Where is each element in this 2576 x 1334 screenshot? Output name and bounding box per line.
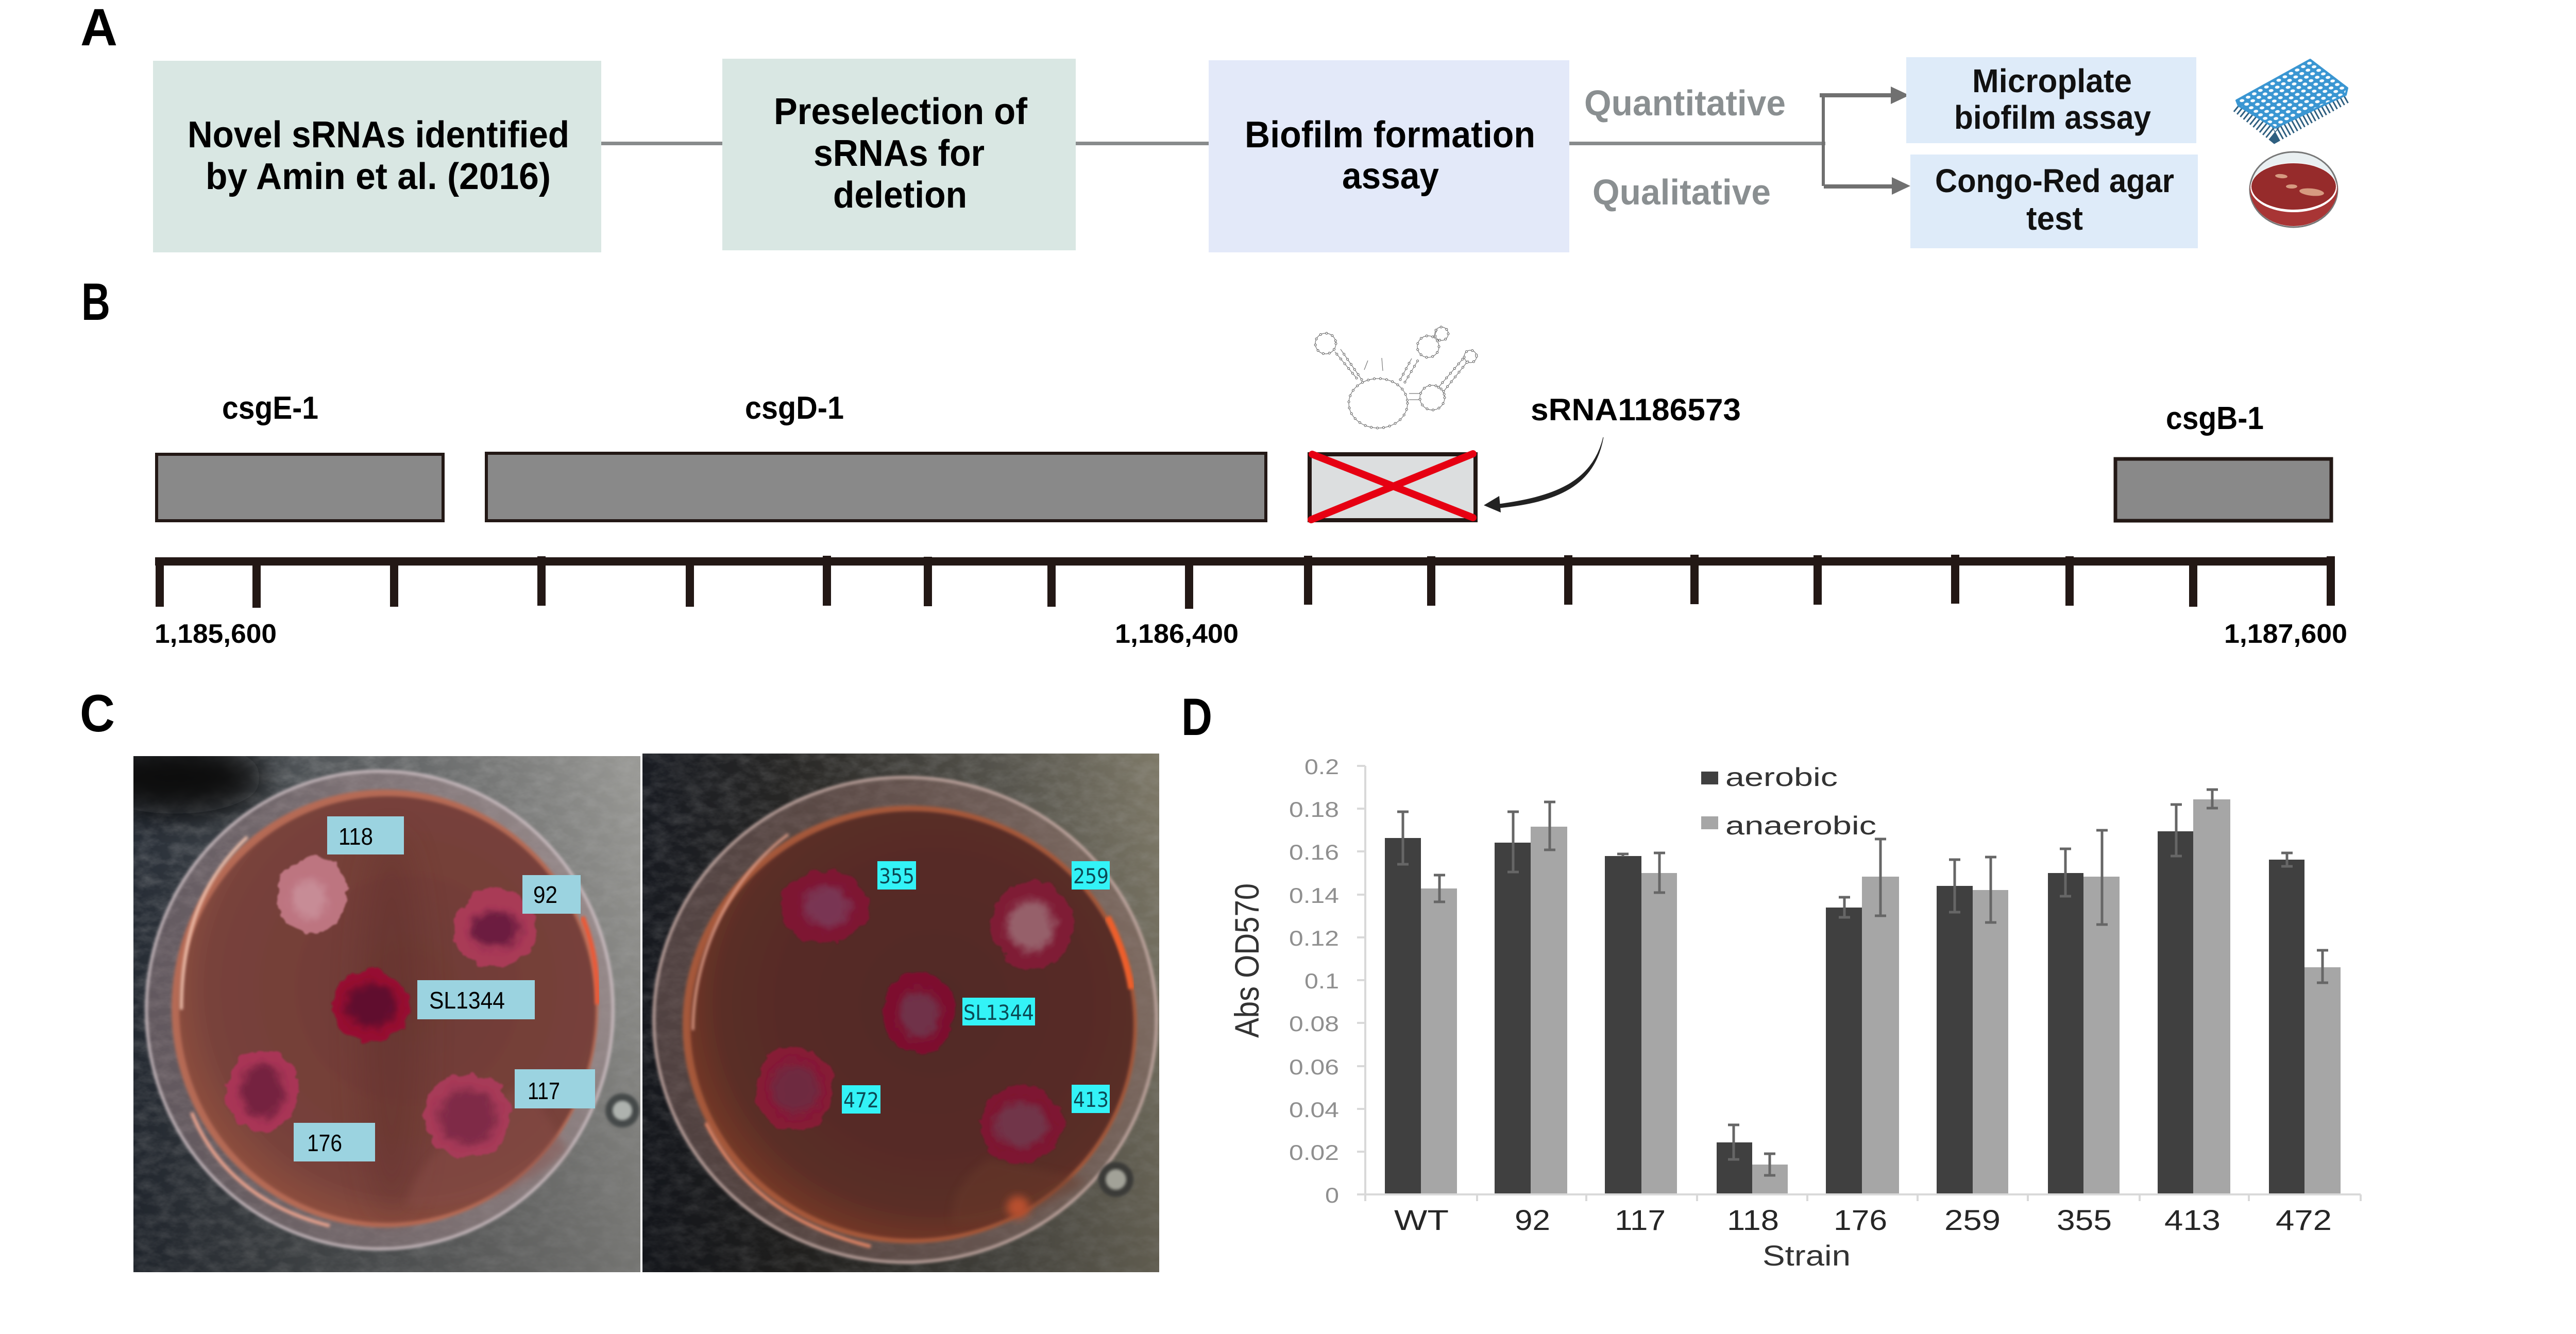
photo background xyxy=(642,754,1159,1272)
label 117: 117 xyxy=(528,1078,560,1104)
panel C: right agar plate photo xyxy=(642,754,1159,1272)
legend: anaerobic xyxy=(1725,811,1876,840)
colony 117 xyxy=(425,1073,511,1158)
label 118: 118 xyxy=(338,823,373,850)
error bars xyxy=(1397,790,2328,1175)
colony 472 xyxy=(756,1047,833,1131)
y axis tick labels: 0.14 xyxy=(1289,883,1339,908)
x axis category labels xyxy=(1394,1204,2332,1236)
gene csgD-1 xyxy=(486,453,1266,521)
box: novel sRNAs: by Amin et al. (2016) xyxy=(206,156,551,197)
icon: microplate xyxy=(2236,60,2347,133)
x axis category labels: 117 xyxy=(1615,1204,1666,1236)
label 176 xyxy=(294,1123,375,1161)
deleted sRNA gene xyxy=(1310,454,1476,520)
axes xyxy=(1357,766,2361,1201)
gene csgB-1 xyxy=(2115,459,2331,521)
y axis tick labels: 0.06 xyxy=(1289,1055,1339,1079)
panel label D: D xyxy=(1181,688,1212,746)
box: congo-red agar test: test xyxy=(2026,200,2083,237)
x axis title: Strain xyxy=(1762,1239,1851,1272)
colony 92 xyxy=(453,891,537,967)
bead marker xyxy=(1098,1162,1133,1197)
label 118 xyxy=(327,816,404,854)
label 472: 472 xyxy=(843,1089,879,1113)
x axis category labels: 413 xyxy=(2164,1204,2221,1236)
coordinate 1,185,600: 1,185,600 xyxy=(155,619,277,649)
branching arrows xyxy=(1820,87,1910,195)
colony 259 xyxy=(991,881,1074,968)
box: preselection: deletion xyxy=(833,175,967,216)
label: qualitative: Qualitative xyxy=(1592,172,1771,212)
aerobic bars xyxy=(1385,831,2304,1193)
label: quantitative: Quantitative xyxy=(1584,83,1786,123)
gene csgE-1 xyxy=(157,454,443,521)
coordinate axis xyxy=(155,555,2335,609)
y axis tick labels: 0.08 xyxy=(1289,1012,1339,1036)
label 176: 176 xyxy=(307,1130,342,1156)
box: biofilm formation assay: assay xyxy=(1342,156,1439,197)
y axis tick labels: 0.04 xyxy=(1289,1098,1339,1122)
label 355: 355 xyxy=(879,865,914,888)
icon: petri dish xyxy=(2250,152,2337,227)
label 92: 92 xyxy=(533,881,557,908)
y axis tick labels: 0.12 xyxy=(1289,926,1339,950)
box: preselection xyxy=(722,59,1076,250)
photo background xyxy=(133,756,640,1272)
label 117 xyxy=(515,1069,595,1108)
panel label C: C xyxy=(80,684,115,743)
box: preselection: Preselection of xyxy=(774,91,1028,132)
x axis category labels: 355 xyxy=(2057,1204,2112,1236)
box: congo-red agar test: Congo-Red agar xyxy=(1935,162,2174,199)
y axis tick labels: 0.16 xyxy=(1289,840,1339,864)
panel label B: B xyxy=(81,272,110,331)
panel C: left agar plate photo xyxy=(133,756,640,1272)
colony 355 xyxy=(781,870,870,943)
box: microplate biofilm assay: Microplate xyxy=(1972,62,2132,99)
label 92 xyxy=(522,875,581,914)
bead marker xyxy=(605,1093,639,1127)
gene label csgD-1: csgD-1 xyxy=(745,390,844,426)
y axis title: Abs OD570 xyxy=(1228,883,1266,1038)
box: congo-red agar test xyxy=(1910,155,2198,248)
petri dish xyxy=(146,771,613,1249)
x axis category labels: 259 xyxy=(1944,1204,2001,1236)
curved arrow to deleted gene xyxy=(1484,437,1603,512)
label 413: 413 xyxy=(1073,1088,1109,1112)
label SL1344: SL1344 xyxy=(429,987,505,1014)
x axis category labels: 92 xyxy=(1515,1204,1550,1236)
box: novel sRNAs xyxy=(153,61,601,252)
y axis tick labels xyxy=(1289,755,1339,1207)
y axis tick labels: 0.2 xyxy=(1304,755,1339,779)
label 259: 259 xyxy=(1073,865,1109,888)
x axis category labels: 118 xyxy=(1727,1204,1779,1236)
petri dish xyxy=(654,777,1157,1262)
legend xyxy=(1701,763,1876,840)
RNA secondary structure xyxy=(1315,327,1477,428)
anaerobic bars xyxy=(1421,799,2341,1193)
box: novel sRNAs: Novel sRNAs identified xyxy=(188,114,569,156)
y axis tick labels: 0.02 xyxy=(1289,1140,1339,1165)
box: biofilm formation assay: Biofilm formation xyxy=(1245,114,1535,156)
gene label csgB-1: csgB-1 xyxy=(2166,401,2264,436)
y axis tick labels: 0 xyxy=(1325,1183,1339,1207)
box: microplate biofilm assay xyxy=(1906,57,2196,143)
x axis category labels: WT xyxy=(1394,1204,1449,1236)
coordinate 1,187,600: 1,187,600 xyxy=(2224,619,2347,649)
coordinate 1,186,400: 1,186,400 xyxy=(1115,619,1239,649)
label SL1344: SL1344 xyxy=(963,1001,1034,1025)
label sRNA1186573: sRNA1186573 xyxy=(1531,392,1741,427)
y axis tick labels: 0.1 xyxy=(1304,969,1339,993)
colony SL1344 xyxy=(883,973,955,1053)
box: preselection: sRNAs for xyxy=(814,133,985,174)
panel B: genome map xyxy=(155,327,2347,649)
colony 176 xyxy=(226,1050,298,1132)
y axis tick labels: 0.18 xyxy=(1289,797,1339,822)
panel D: bar chart xyxy=(1228,755,2361,1272)
panel A: workflow xyxy=(153,57,2347,252)
colony 413 xyxy=(979,1086,1063,1164)
x axis category labels: 472 xyxy=(2276,1204,2332,1236)
colony 118 xyxy=(277,857,349,933)
label SL1344 xyxy=(417,980,535,1019)
x axis category labels: 176 xyxy=(1834,1204,1887,1236)
legend: aerobic xyxy=(1725,763,1838,792)
box: biofilm formation assay xyxy=(1209,60,1569,252)
box: microplate biofilm assay: biofilm assay xyxy=(1954,99,2151,136)
colony SL1344 xyxy=(332,969,409,1042)
gene label csgE-1: csgE-1 xyxy=(222,390,318,426)
connector lines xyxy=(600,142,1825,145)
